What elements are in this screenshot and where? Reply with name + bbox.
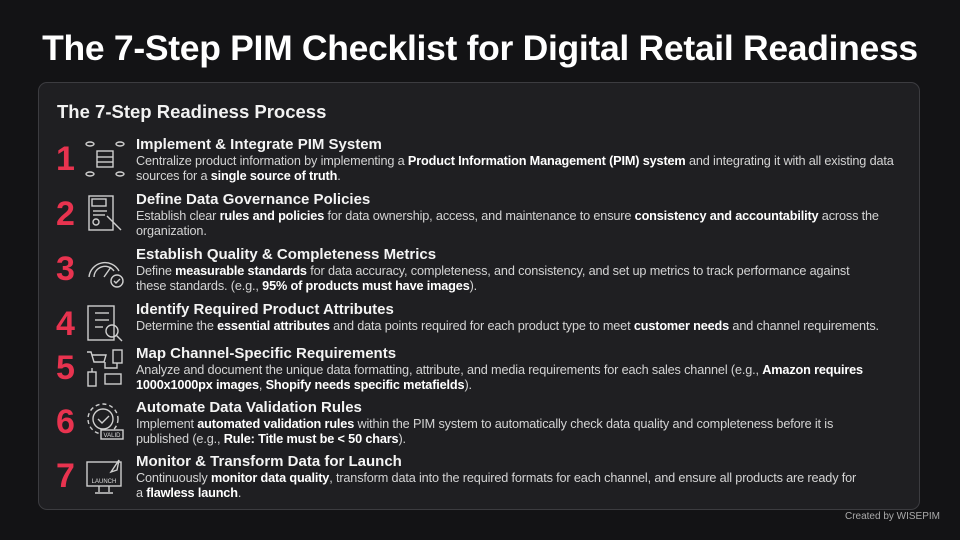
- title: The 7-Step PIM Checklist for Digital Retail Readiness: [42, 28, 918, 68]
- step 1: [56, 136, 894, 182]
- number 5: 5: [56, 349, 75, 387]
- icon: gear valid: VALID: [104, 433, 121, 439]
- number 7: 7: [56, 457, 75, 495]
- description 5: Analyze and document the unique data formatting, attribute, and media requirements for each sales channel (e.g., Amazon requires: [136, 363, 863, 377]
- description 6: [136, 417, 833, 446]
- number 3: 3: [56, 250, 75, 288]
- description 3: [136, 264, 850, 292]
- description 7: a flawless launch.: [136, 486, 241, 500]
- description 6: Implement automated validation rules within the PIM system to automatically check data quality and completeness before it is: [136, 417, 833, 431]
- heading 7: Monitor & Transform Data for Launch: [136, 453, 402, 470]
- panel heading: The 7-Step Readiness Process: [57, 101, 326, 122]
- description 6: published (e.g., Rule: Title must be < 50 chars).: [136, 432, 406, 446]
- heading 2: Define Data Governance Policies: [136, 191, 370, 208]
- description 5: 1000x1000px images, Shopify needs specific metafields).: [136, 378, 472, 392]
- description 4: Determine the essential attributes and data points required for each product type to meet customer needs and channel requirements.: [136, 319, 879, 333]
- panel: readiness process: [38, 82, 920, 510]
- icon: rule gavel: [88, 195, 122, 231]
- description 1: sources for a single source of truth.: [136, 168, 341, 182]
- description 7: [136, 471, 856, 500]
- heading 1: Implement & Integrate PIM System: [136, 136, 382, 153]
- icon: launch monitor: [86, 460, 122, 494]
- icon: launch monitor: LAUNCH: [92, 479, 116, 485]
- description 3: these standards. (e.g., 95% of products must have images).: [136, 278, 477, 292]
- number 4: 4: [56, 305, 75, 343]
- icon: database integration: [85, 141, 125, 177]
- step 7: [56, 453, 856, 500]
- description 1: [136, 154, 894, 182]
- number 1: 1: [56, 140, 75, 178]
- description 2: organization.: [136, 224, 207, 238]
- description 3: Define measurable standards for data accuracy, completeness, and consistency, and set up metrics to track performance against: [136, 264, 850, 278]
- step 2: [56, 191, 879, 238]
- icon: gauge: [88, 262, 124, 288]
- icon: gear valid: [87, 403, 124, 440]
- description 2: Establish clear rules and policies for data ownership, access, and maintenance to ensure consistency and accountability across the: [136, 209, 879, 223]
- heading 5: Map Channel-Specific Requirements: [136, 345, 396, 362]
- credit: Created by WISEPIM: [845, 511, 940, 522]
- step 5: [56, 345, 863, 392]
- icon: list magnifier: [87, 305, 122, 342]
- step 6: [56, 399, 833, 446]
- step 4: [56, 301, 879, 343]
- heading 6: Automate Data Validation Rules: [136, 399, 362, 416]
- description 2: [136, 209, 879, 238]
- description 1: Centralize product information by implementing a Product Information Management (PIM) system and integrating it with all existing data: [136, 154, 894, 168]
- description 5: [136, 363, 863, 392]
- heading 3: Establish Quality & Completeness Metrics: [136, 246, 436, 263]
- icon: channels: [87, 349, 123, 387]
- number 2: 2: [56, 195, 75, 233]
- step 3: [56, 246, 850, 292]
- description 7: Continuously monitor data quality, transform data into the required formats for each channel, and ensure all products are ready for: [136, 471, 856, 485]
- number 6: 6: [56, 403, 75, 441]
- heading 4: Identify Required Product Attributes: [136, 301, 394, 318]
